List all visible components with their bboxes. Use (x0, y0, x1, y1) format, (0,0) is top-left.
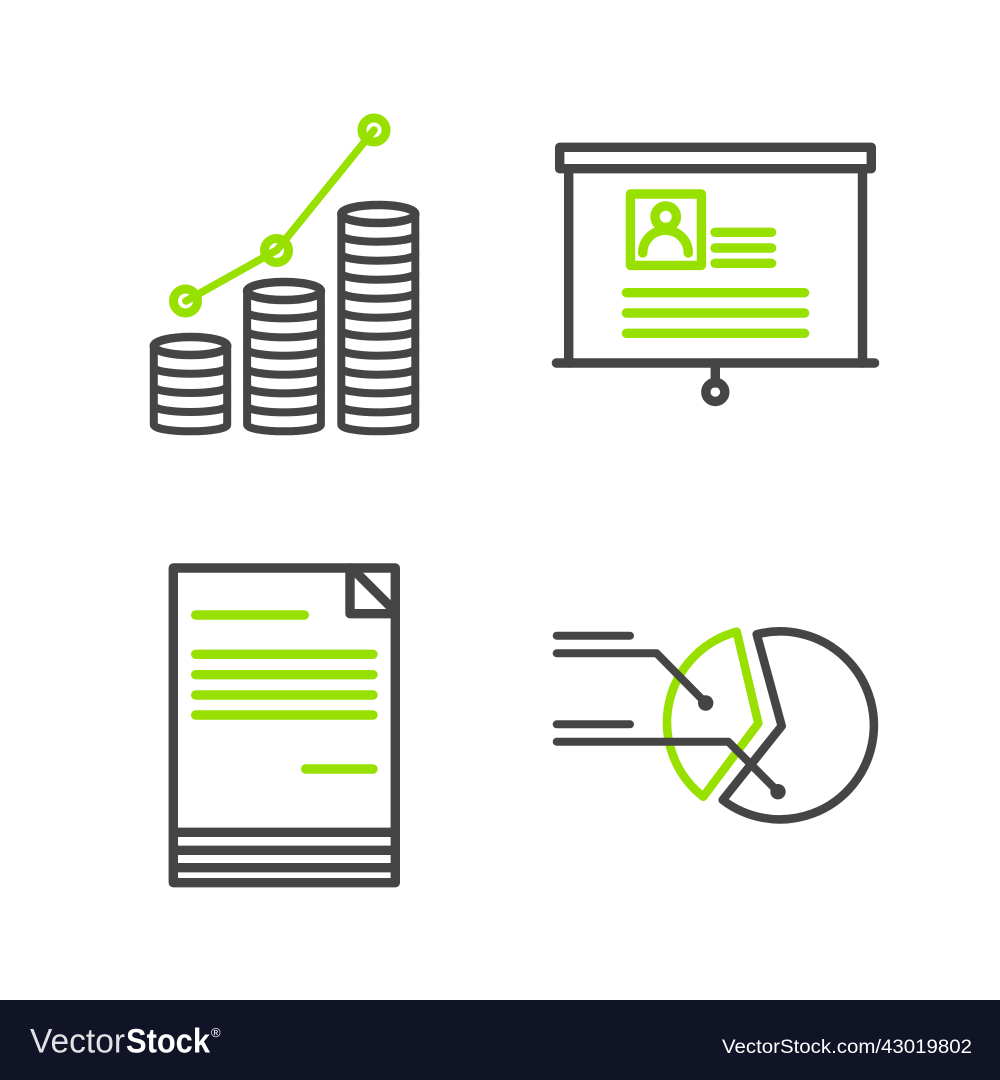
coin stack: tall (341, 205, 415, 431)
registered mark: ® (211, 1025, 221, 1040)
profile text lines (715, 232, 772, 263)
coin stack: short (154, 337, 227, 431)
growth line with ring markers (174, 118, 386, 313)
callout: upper (557, 636, 709, 707)
document signature line (306, 764, 373, 774)
icon: coin stacks with growth line (154, 118, 415, 431)
body text lines (626, 293, 805, 333)
footer stripes (173, 832, 395, 868)
screen frame and stand (556, 147, 875, 402)
image id: VectorStock.com/43019802 (722, 1036, 972, 1058)
coin stack: medium (247, 282, 321, 431)
icon: document (173, 568, 395, 883)
document heading line (196, 610, 304, 620)
footer bar (0, 1000, 1000, 1080)
profile photo (630, 194, 701, 265)
icon: pie chart with callouts (557, 631, 874, 819)
page outline with folded corner (173, 568, 395, 883)
dark pie body (723, 631, 874, 819)
footer logo: Stock (126, 1023, 211, 1061)
green pie slice (667, 632, 758, 797)
footer logo: Vector (30, 1023, 125, 1061)
footer logo (30, 1023, 211, 1061)
document body lines (196, 654, 373, 715)
callout: lower (557, 724, 782, 795)
icon: projection screen with profile (556, 147, 875, 402)
